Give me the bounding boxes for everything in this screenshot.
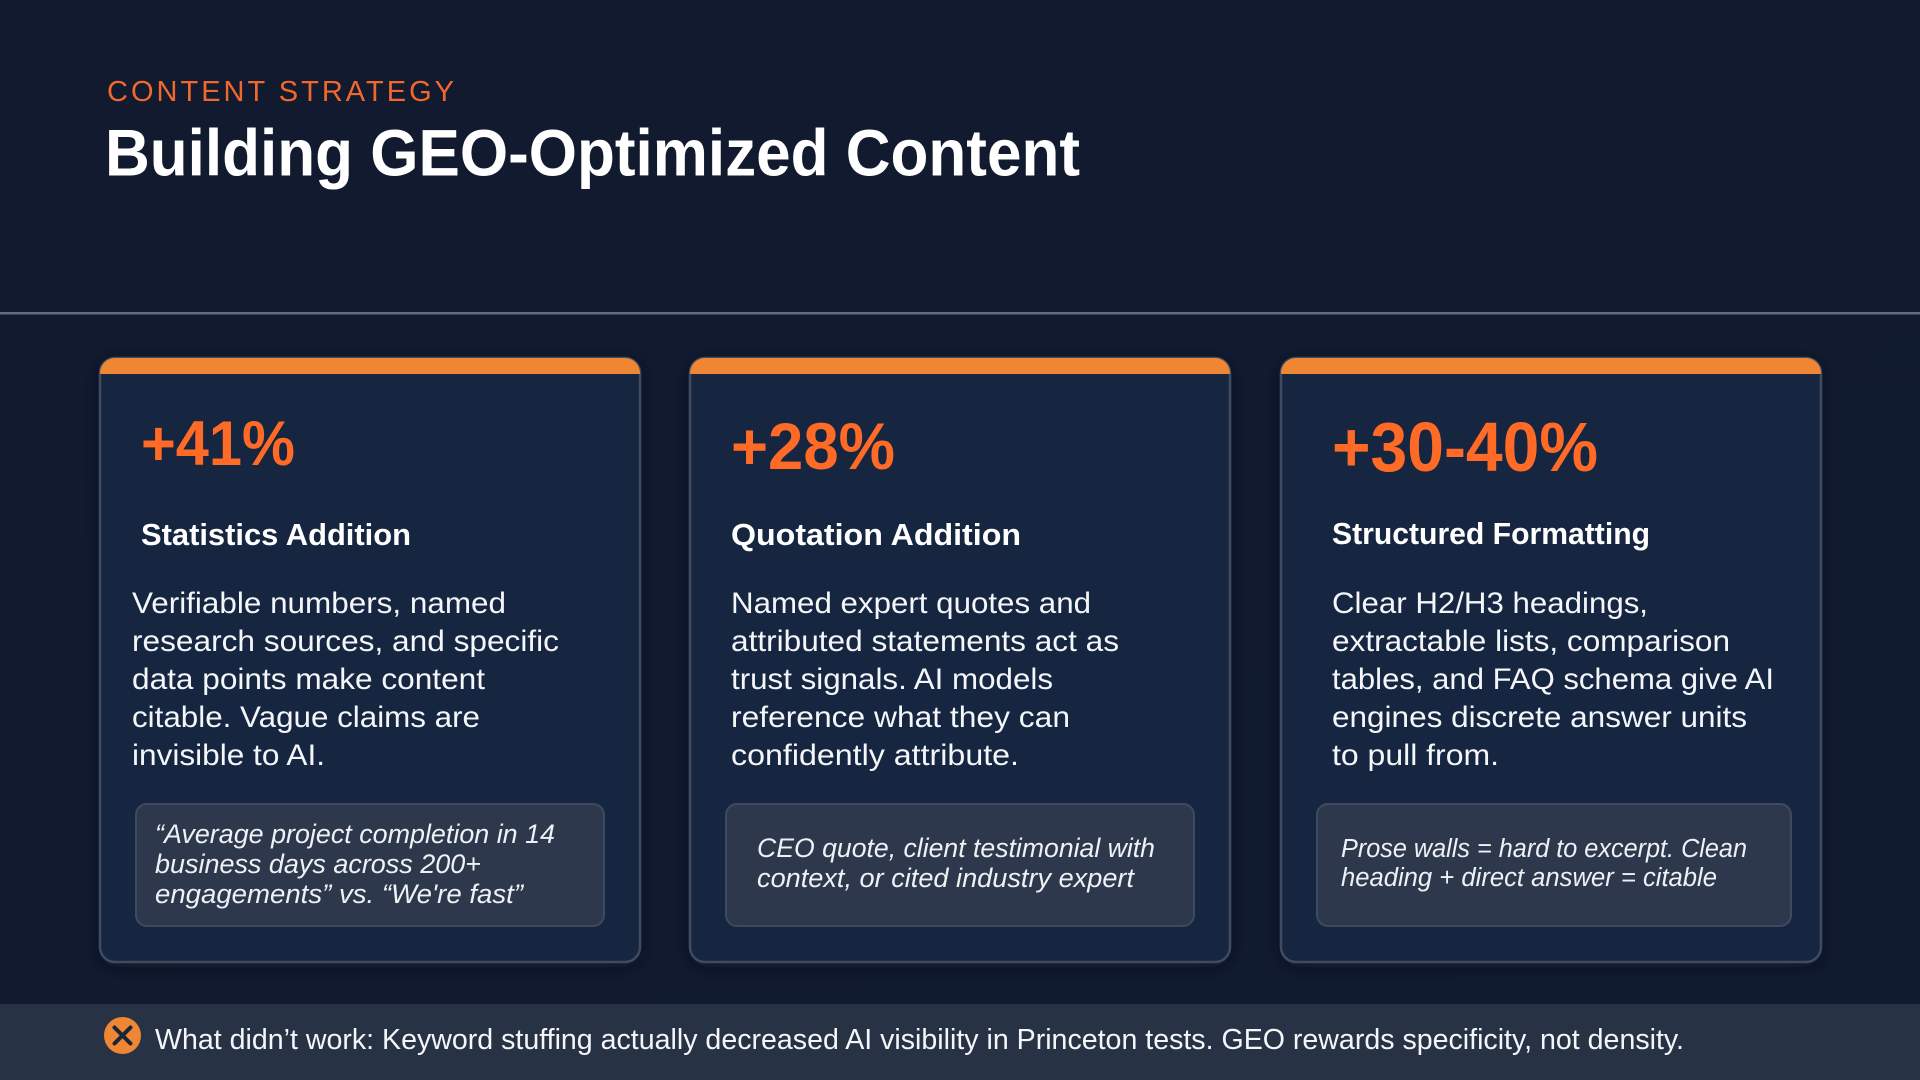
description: [1332, 587, 1774, 772]
heading: Structured Formatting: [1332, 516, 1650, 551]
description: extractable lists, comparison: [1332, 625, 1730, 658]
callout: example: context, or cited industry expert: [757, 863, 1136, 893]
callout: example: [136, 804, 604, 926]
description: [132, 587, 559, 772]
callout: example: [1317, 804, 1791, 926]
title: Building GEO-Optimized Content: [105, 116, 1080, 190]
description: [731, 587, 1119, 772]
accent bar: [690, 358, 1230, 374]
panel: structured formatting: [1281, 358, 1821, 962]
description: confidently attribute.: [731, 739, 1019, 772]
heading: Statistics Addition: [141, 517, 411, 552]
footer note: What didn’t work: Keyword stuffing actually decreased AI visibility in Princeton tests. GEO rewards specificity, not density.: [155, 1024, 1684, 1056]
accent bar: [1281, 358, 1821, 374]
panel: statistics addition: [100, 358, 640, 962]
footer bar: [0, 1004, 1920, 1080]
callout: example: Prose walls = hard to excerpt. Clean: [1341, 835, 1747, 863]
description: engines discrete answer units: [1332, 701, 1747, 734]
description: reference what they can: [731, 701, 1070, 734]
header: [105, 76, 1080, 190]
callout: example: CEO quote, client testimonial with: [757, 833, 1155, 863]
description: tables, and FAQ schema give AI: [1332, 663, 1774, 696]
description: Verifiable numbers, named: [132, 587, 506, 620]
callout: example: heading + direct answer = citable: [1341, 864, 1717, 892]
panel: quotation addition: [690, 358, 1230, 962]
description: Named expert quotes and: [731, 587, 1091, 620]
description: attributed statements act as: [731, 625, 1119, 658]
description: research sources, and specific: [132, 625, 559, 658]
icon: warning x: [104, 1017, 141, 1054]
stat: +30-40%: [1332, 408, 1598, 486]
description: citable. Vague claims are: [132, 701, 480, 734]
callout: example: [726, 804, 1194, 926]
description: invisible to AI.: [132, 739, 325, 772]
eyebrow label: CONTENT STRATEGY: [107, 76, 454, 108]
description: trust signals. AI models: [731, 663, 1053, 696]
heading: Quotation Addition: [731, 517, 1021, 552]
description: to pull from.: [1332, 739, 1499, 772]
description: data points make content: [132, 663, 486, 696]
description: Clear H2/H3 headings,: [1332, 587, 1648, 620]
stat: +41%: [141, 409, 295, 479]
callout: example: “Average project completion in 14: [155, 819, 555, 849]
stat: +28%: [731, 409, 895, 483]
callout: example: business days across 200+: [155, 849, 481, 879]
accent bar: [100, 358, 640, 374]
callout: example: engagements” vs. “We're fast”: [155, 879, 524, 909]
